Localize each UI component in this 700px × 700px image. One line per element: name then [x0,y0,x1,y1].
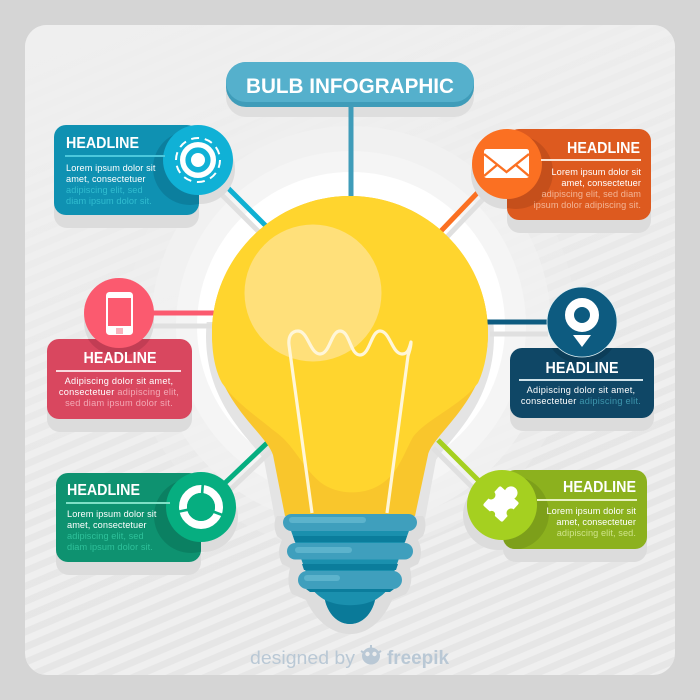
title connector line [348,106,354,198]
body text: Lorem ipsum dolor sit [551,167,641,177]
base band 3 [298,571,402,589]
body text: ipsum dolor adipiscing sit. [534,200,641,210]
connector: blue [225,185,266,226]
base groove [293,536,407,592]
connector: green [225,443,267,483]
icon: map pin [547,287,617,357]
heading: HEADLINE [567,140,640,157]
body text: Lorem ipsum dolor sit [66,163,156,173]
body text: Adipiscing dolor sit amet, [527,385,635,395]
icon: phone [84,278,154,348]
panel: green headline [56,472,238,575]
icon: ring chart [166,472,236,542]
connector: orange [441,188,482,231]
bulb base [274,514,426,634]
panel: orange headline [471,129,651,233]
title pill [226,62,474,117]
icon: freepik mascot [361,645,381,664]
panel: red headline [47,278,192,432]
bulb glass [212,196,488,516]
base highlights [289,517,366,581]
filament [289,331,411,513]
bulb [212,196,488,516]
body text: Lorem ipsum dolor sit [546,506,636,516]
footer credit: designed by [250,648,355,668]
footer credit: freepik [387,648,449,669]
base body [290,528,410,624]
body text: adipiscing elit, sed [67,531,144,541]
body text: amet, consectetuer [66,174,146,184]
body text: sed diam ipsum dolor sit. [65,398,173,408]
heading: HEADLINE [66,135,139,152]
body text: adipiscing elit, sed [66,185,143,195]
title text: BULB INFOGRAPHIC [246,75,454,98]
base shadow [274,516,426,634]
body text: consectetuer adipiscing elit. [521,396,641,406]
heading: HEADLINE [546,360,618,377]
connector shadows [150,192,548,490]
connector: navy [487,320,550,324]
body text: diam ipsum dolor sit. [67,542,153,552]
icon: puzzle [467,470,537,540]
panel: lime headline [463,470,647,562]
connector: red [150,310,215,316]
body text: amet, consectetuer [556,517,636,527]
base band 2 [287,543,413,560]
bulb bright area [212,196,488,492]
body text: amet, consectetuer [561,178,641,188]
heading: HEADLINE [84,350,156,367]
panel: blue headline [54,125,235,228]
base band 1 [283,514,417,531]
bulb shadow [206,322,494,520]
body text: adipiscing elit, sed diam [541,189,641,199]
bulb highlight [244,224,382,362]
body text: amet, consectetuer [67,520,147,530]
icon: envelope [472,129,542,199]
body text: consectetuer adipiscing elit, [59,387,179,397]
body text: diam ipsum dolor sit. [66,196,152,206]
connector: lime [438,440,479,481]
body text: adipiscing elit, sed. [557,528,636,538]
body text: Lorem ipsum dolor sit [67,509,157,519]
base tip [325,600,375,624]
body text: Adipiscing dolor sit amet, [65,376,173,386]
heading: HEADLINE [563,479,636,496]
heading: HEADLINE [67,482,140,499]
icon: target [163,125,233,195]
panel: navy headline [510,287,654,431]
footer credit [250,645,449,669]
